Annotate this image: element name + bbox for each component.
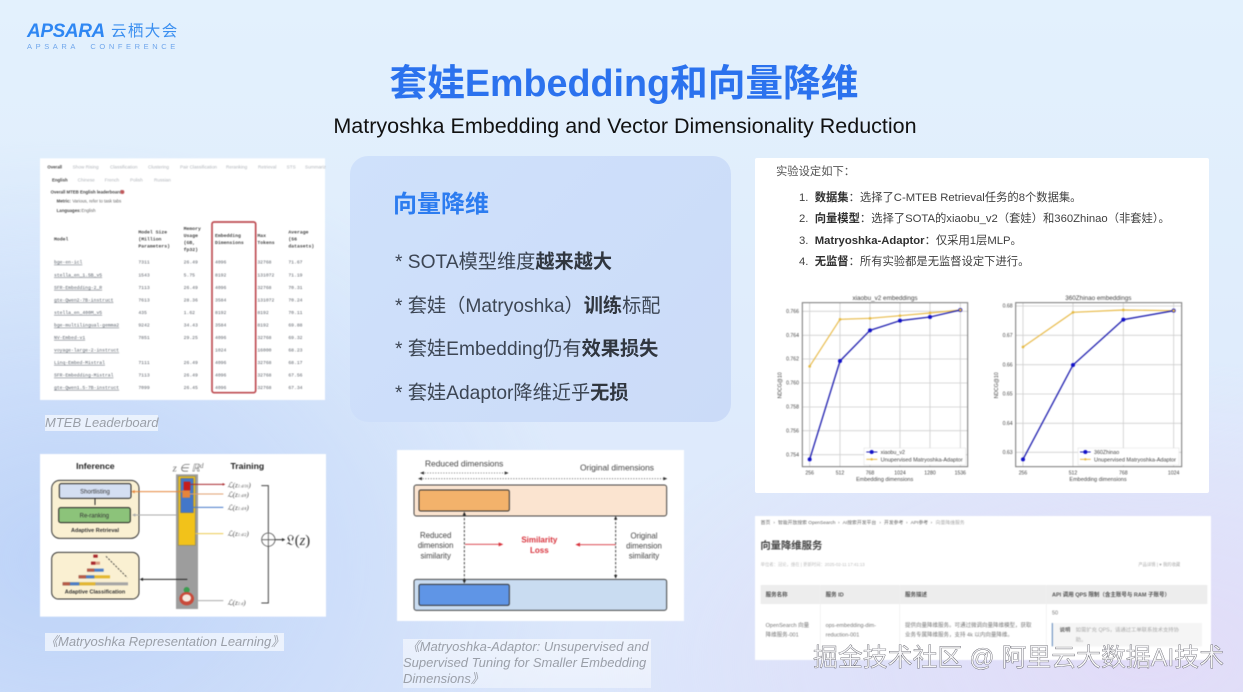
panel: MTEB leaderboard table: Usage [184,233,198,239]
panel: Matryoshka representation learning diagram: d [200,461,204,470]
line chart: xiaobu_v2 embeddings: 1280 [924,470,936,476]
line chart: xiaobu_v2 embeddings: 0.756 [786,428,799,434]
panel: Matryoshka representation learning diagram: Inference [76,461,115,471]
line chart: 360Zhinao embeddings: 0.67 [1003,333,1013,339]
panel: MTEB leaderboard table: 5.75 [184,272,195,278]
line chart: 360Zhinao embeddings: 0.63 [1003,450,1013,456]
panel: Matryoshka representation learning diagram: ℒ(z1:d/2) [227,529,249,538]
panel: MTEB leaderboard table: Clustering [148,164,169,169]
panel: MTEB leaderboard table: STS [287,164,296,169]
panel: vector dimensionality reduction summary [350,156,731,422]
logo Chinese name: 云栖大会 [111,23,179,40]
panel: vector dimensionality reduction service doc: 50 [1052,610,1058,616]
panel: MTEB leaderboard table: 7613 [138,297,150,303]
panel: Matryoshka representation learning diagram: ℒ(z1:d/4) [227,503,249,512]
caption: Matryoshka-Adaptor: Supervised Tuning for Smaller Embedding [403,655,646,670]
panel: vector dimensionality reduction service doc: 业务专属降维服务，支持 4k 以内向量降维。 [905,631,1013,639]
line chart: xiaobu_v2 embeddings: Unupervised Matryoshka-Adaptor [881,457,963,463]
panel: MTEB leaderboard table: 32768 [257,285,272,291]
panel: MTEB leaderboard table: 8192 [257,323,269,329]
line chart: 360Zhinao embeddings: 0.66 [1003,362,1013,368]
panel: vector dimensionality reduction service doc: 降维服务-001 [766,631,799,639]
panel: MTEB leaderboard table: 67.34 [288,385,303,391]
panel: MTEB leaderboard table: 16000 [257,348,272,354]
panel: MTEB leaderboard table: 7851 [138,335,150,341]
panel: MTEB leaderboard table: 34.43 [184,323,198,329]
panel: MTEB leaderboard table: Chinese [78,178,95,183]
panel: MTEB leaderboard table: 26.49 [184,285,198,291]
line chart: xiaobu_v2 embeddings: 0.766 [786,309,799,315]
panel: MTEB leaderboard table: 1024 [215,348,226,354]
panel: vector dimensionality reduction service doc: reduction-001 [826,633,859,639]
panel: MTEB leaderboard table: Metric: [57,199,71,204]
panel: MTEB leaderboard table: bge-multilingual-gemma2 [54,323,119,329]
panel: MTEB leaderboard table: 4096 [215,335,226,341]
panel: MTEB leaderboard table: gte-Qwen1.5-7B-instruct [54,385,119,391]
panel: vector dimensionality reduction service doc: 产品详情 | ♥ 我的收藏 [1138,561,1181,568]
panel: vector dimensionality reduction service doc: 智能开放搜索 OpenSearch [778,519,836,526]
panel: vector dimensionality reduction service doc: 服务名称 [766,591,788,599]
panel: MTEB leaderboard table: NV-Embed-v1 [54,335,85,341]
panel: vector dimensionality reduction service doc: 如需扩充 QPS，请通过工单联系技术支持协 [1076,626,1180,634]
line chart: 360Zhinao embeddings: 360Zhinao [1094,450,1119,456]
line chart: 360Zhinao embeddings: 0.65 [1003,392,1013,398]
panel: Matryoshka representation learning diagram: Adaptive Retrieval [71,528,119,534]
panel: MTEB leaderboard table: 71.67 [288,260,303,266]
panel: Matryoshka representation learning diagram: ℒ(z1:d) [227,598,246,607]
line chart: xiaobu_v2 embeddings: Embedding dimensions [856,477,913,483]
panel: vector dimensionality reduction service doc [754,516,1212,660]
bullet: Embedding loss: * 套娃Embedding仍有效果损失 [395,339,658,360]
line chart: 360Zhinao embeddings: 1024 [1168,470,1180,476]
logo: Apsara Conference [26,21,179,51]
panel: MTEB leaderboard table: 28.36 [184,297,198,303]
panel: similarity loss diagram: Loss [530,546,549,555]
panel: vector dimensionality reduction service doc: API参考 [911,519,928,526]
panel: MTEB leaderboard table: 8192 [257,310,269,316]
panel: MTEB leaderboard table: 29.25 [184,335,198,341]
panel: vector dimensionality reduction service doc: 向量降维服务 [760,539,823,552]
line chart: xiaobu_v2 embeddings: 0.760 [786,381,799,387]
line chart: xiaobu_v2 embeddings: xiaobu_v2 embeddings [852,295,918,302]
panel: MTEB leaderboard table: (GB, [184,240,195,246]
panel: MTEB leaderboard table: 3584 [215,297,226,303]
panel: MTEB leaderboard table [40,158,327,400]
panel: MTEB leaderboard table: (56 [288,236,297,242]
line chart: 360Zhinao embeddings [994,295,1182,483]
line chart: xiaobu_v2 embeddings: 1536 [955,470,966,476]
line chart: 360Zhinao embeddings: 768 [1119,470,1128,476]
panel: MTEB leaderboard table: Max [257,233,266,239]
panel: MTEB leaderboard table: 9242 [138,323,150,329]
panel: MTEB leaderboard table: gte-Qwen2-7B-instruct [54,297,114,303]
panel: vector dimensionality reduction service doc: 向量降维服务 [936,519,965,526]
panel: vector dimensionality reduction service doc: 单位者：冠论，维在 | 更新时间：2025-02-11 17:41:13 [761,561,865,568]
panel: Matryoshka representation learning diagram [40,454,326,618]
panel: vector dimensionality reduction service doc: › [838,521,840,526]
watermark: 掘金技术社区 @ 阿里云大数据AI技术 [813,644,1224,672]
line chart: 360Zhinao embeddings: Embedding dimensions [1069,477,1127,483]
line chart: 360Zhinao embeddings: 256 [1019,470,1027,476]
panel: MTEB leaderboard table: 4096 [215,373,226,379]
panel: MTEB leaderboard table: Various, refer to task tabs [72,199,121,204]
panel: MTEB leaderboard table: 3584 [215,323,226,329]
bullet: SOTA dimensions: * SOTA模型维度越来越大 [395,252,612,273]
panel: vector dimensionality reduction service doc: › [906,521,908,526]
bullet: Matryoshka training: * 套娃（Matryoshka）训练标配 [395,296,660,317]
panel: MTEB leaderboard table: 131072 [257,297,274,303]
panel: MTEB leaderboard table: 70.11 [288,310,303,316]
panel: vector dimensionality reduction service doc: 开发参考 [884,519,903,526]
panel: MTEB leaderboard table: 8192 [215,310,226,316]
panel: MTEB leaderboard table: 26.49 [184,260,198,266]
panel: similarity loss diagram: Original [631,532,658,541]
caption: Matryoshka Representation Learning: 《Matryoshka Representation Learning》 [45,634,284,649]
panel: MTEB leaderboard table: English [81,208,96,213]
panel: MTEB leaderboard table: 4096 [215,260,226,266]
panel: MTEB leaderboard table: Pair Classification [180,164,217,169]
panel: Matryoshka representation learning diagram: ℒ(z1:d/8) [227,490,249,499]
panel: MTEB leaderboard table: 1.62 [184,310,195,316]
panel: MTEB leaderboard table: Average [288,229,309,235]
line chart: 360Zhinao embeddings: 360Zhinao embeddings [1065,295,1131,302]
panel: experiment settings and charts [755,158,1209,493]
panel: MTEB leaderboard table: 4096 [215,385,226,391]
panel: MTEB leaderboard table: 70.31 [288,285,303,291]
panel: vector dimensionality reduction service doc: › [931,521,933,526]
panel: vector dimensionality reduction service doc: 助。 [1076,636,1086,644]
line chart: 360Zhinao embeddings: 0.68 [1003,304,1013,310]
panel: MTEB leaderboard table: 7111 [138,360,150,366]
panel: vector dimensionality reduction service doc: AI搜索开发平台 [843,519,876,526]
panel: MTEB leaderboard table: Show Rising [73,164,99,169]
panel: MTEB leaderboard table: SFR-Embedding-Mistral [54,373,114,379]
panel: vector dimensionality reduction service doc: › [879,521,881,526]
panel: similarity loss diagram: Original dimensions [580,464,654,473]
panel: MTEB leaderboard table: SFR-Embedding-2_R [54,285,102,291]
panel: MTEB leaderboard table: 71.19 [288,272,303,278]
panel: MTEB leaderboard table: 32768 [257,373,272,379]
panel: MTEB leaderboard table: Model [54,236,69,242]
panel: MTEB leaderboard table: Model Size [138,229,167,235]
panel: MTEB leaderboard table: voyage-large-2-instruct [54,348,119,354]
panel: Matryoshka representation learning diagram: Re-ranking [80,513,109,519]
caption: MTEB Leaderboard: MTEB Leaderboard [45,415,158,430]
panel: MTEB leaderboard table: Embedding [215,233,241,239]
title: 套娃Embedding和向量降维 [390,62,858,104]
panel: similarity loss diagram: Similarity [521,535,558,544]
list item 3: 3. Matryoshka-Adaptor：仅采用1层MLP。 [799,235,1022,247]
panel: MTEB leaderboard table: Retrieval [258,164,276,169]
charts: NDCG vs embedding dimensions [776,294,1183,483]
panel: MTEB leaderboard table: Languages: [57,208,82,213]
panel: MTEB leaderboard table: 7113 [138,285,150,291]
panel: Matryoshka representation learning diagram: Adaptive Classification [65,590,126,596]
panel: similarity loss diagram: dimension [626,542,662,551]
panel: MTEB leaderboard table: 32768 [257,385,272,391]
panel: similarity loss diagram: Reduced dimensions [425,459,503,468]
panel: vector dimensionality reduction service doc: 服务描述 [905,591,928,599]
line chart: xiaobu_v2 embeddings [777,295,968,483]
bullet: Adaptor: * 套娃Adaptor降维近乎无损 [395,383,629,404]
panel: MTEB leaderboard table: 32768 [257,360,272,366]
panel: MTEB leaderboard table: Russian [154,178,171,183]
panel: MTEB leaderboard table: 26.49 [184,373,198,379]
panel: MTEB leaderboard table: Parameters) [138,244,170,250]
panel: MTEB leaderboard table: (Million [138,236,161,242]
panel: similarity loss diagram [396,450,684,622]
line chart: xiaobu_v2 embeddings: NDCG@10 [777,372,783,398]
panel: MTEB leaderboard table: 67.56 [288,373,303,379]
panel: MTEB leaderboard table: 4096 [215,285,226,291]
panel: vector dimensionality reduction service doc: 首页 [761,519,770,526]
line chart: xiaobu_v2 embeddings: 0.762 [786,357,799,363]
line chart: 360Zhinao embeddings: NDCG@10 [994,372,1000,398]
panel: MTEB leaderboard table: stella_en_1.5B_v5 [54,272,102,278]
panel: MTEB leaderboard table: 69.88 [288,323,303,329]
panel: MTEB leaderboard table: French [105,178,120,183]
panel: MTEB leaderboard table: 1543 [138,272,150,278]
panel: MTEB leaderboard table: 70.24 [288,297,303,303]
panel: vector dimensionality reduction service doc: › [773,521,775,526]
logo English line: APSARA CONFERENCE [27,42,179,51]
panel: MTEB leaderboard table: Reranking [226,164,248,169]
panel: MTEB leaderboard table: Tokens [257,240,275,246]
panel heading: 向量降维 [393,191,489,218]
panel: vector dimensionality reduction service doc: 提供向量降维服务。可通过微调向量降维模型，获取 [905,621,1032,629]
line chart: xiaobu_v2 embeddings: 0.758 [786,405,799,411]
line chart: xiaobu_v2 embeddings: xiaobu_v2 [881,450,905,456]
list item 1: 1. 数据集：选择了C-MTEB Retrieval任务的8个数据集。 [799,192,1081,204]
panel: similarity loss diagram: similarity [629,552,659,561]
logo wordmark: APSARA [27,21,105,42]
line chart: 360Zhinao embeddings: 0.64 [1003,421,1013,427]
panel: Matryoshka representation learning diagram: Training [230,461,264,471]
panel: Matryoshka representation learning diagram: z ∈ ℝ [173,463,200,474]
panel: MTEB leaderboard table: 69.32 [288,335,303,341]
panel: MTEB leaderboard table: 32768 [257,335,272,341]
panel: MTEB leaderboard table: 68.17 [288,360,303,366]
panel: MTEB leaderboard table: 4096 [215,360,226,366]
panel: MTEB leaderboard table: bge-en-icl [54,260,82,266]
panel: vector dimensionality reduction service doc: 说明 [1060,626,1071,634]
panel: MTEB leaderboard table: 26.49 [184,360,198,366]
panel: similarity loss diagram: similarity [420,551,451,560]
caption: Matryoshka-Adaptor [403,639,651,688]
panel: Matryoshka representation learning diagram: ℒ(z1:d/16) [227,480,251,489]
panel: MTEB leaderboard table: 435 [138,310,147,316]
panel: MTEB leaderboard table: 8192 [215,272,226,278]
panel: Matryoshka representation learning diagram: Shortlisting [80,489,110,495]
panel: Matryoshka representation learning diagram: 𝔏(z) [286,533,310,549]
experiment intro: 实验设定如下： [776,166,855,178]
panel: similarity loss diagram: Reduced [420,531,451,540]
panel: MTEB leaderboard table: 26.45 [184,385,198,391]
line chart: xiaobu_v2 embeddings: 768 [866,470,874,476]
panel: MTEB leaderboard table: 68.23 [288,348,303,354]
panel: MTEB leaderboard table: Dimensions [215,240,244,246]
panel: MTEB leaderboard table: Linq-Embed-Mistral [54,360,105,366]
panel: MTEB leaderboard table: stella_en_400M_v5 [54,310,102,316]
panel: MTEB leaderboard table: 7113 [138,373,150,379]
caption: Matryoshka-Adaptor: Dimensions》 [403,671,484,686]
line chart: 360Zhinao embeddings: Unupervised Matryoshka-Adaptor [1094,457,1176,463]
panel: MTEB leaderboard table: 131072 [257,272,274,278]
subtitle: Matryoshka Embedding and Vector Dimensionality Reduction [333,114,917,138]
panel: MTEB leaderboard table: Classification [110,164,138,169]
panel: MTEB leaderboard table: Overall [47,164,62,169]
panel: vector dimensionality reduction service doc: 服务 ID [826,591,844,599]
panel: MTEB leaderboard table: Overall MTEB English leaderboard [51,190,122,195]
panel: MTEB leaderboard table: English [52,178,68,183]
line chart: xiaobu_v2 embeddings: 256 [805,470,814,476]
panel: vector dimensionality reduction service doc: OpenSearch 向量 [766,621,810,629]
panel: MTEB leaderboard table: Summariz [305,164,327,169]
caption: Matryoshka-Adaptor: 《Matryoshka-Adaptor: Unsupervised and [407,639,649,654]
panel: MTEB leaderboard table: datasets) [288,244,314,250]
panel: vector dimensionality reduction service doc: API 调用 QPS 限制（含主账号与 RAM 子账号） [1052,591,1170,599]
panel: MTEB leaderboard table: Polish [130,178,143,183]
line chart: 360Zhinao embeddings: 512 [1069,470,1077,476]
list item 2: 2. 向量模型：选择了SOTA的xiaobu_v2（套娃）和360Zhinao（非套娃）。 [799,213,1170,225]
panel: MTEB leaderboard table: 7311 [138,260,150,266]
line chart: xiaobu_v2 embeddings: 512 [836,470,844,476]
panel: vector dimensionality reduction service doc: ops-embedding-dim- [826,623,876,629]
line chart: xiaobu_v2 embeddings: 1024 [894,470,906,476]
panel: MTEB leaderboard table: fp32) [184,247,198,253]
panel: MTEB leaderboard table: 7099 [138,385,150,391]
list item 4: 4. 无监督：所有实验都是无监督设定下进行。 [799,256,1029,268]
line chart: xiaobu_v2 embeddings: 0.754 [786,452,799,458]
panel: similarity loss diagram: dimension [418,541,454,550]
line chart: xiaobu_v2 embeddings: 0.764 [786,333,799,339]
panel: MTEB leaderboard table: 32768 [257,260,272,266]
panel: MTEB leaderboard table: Memory [184,226,201,232]
